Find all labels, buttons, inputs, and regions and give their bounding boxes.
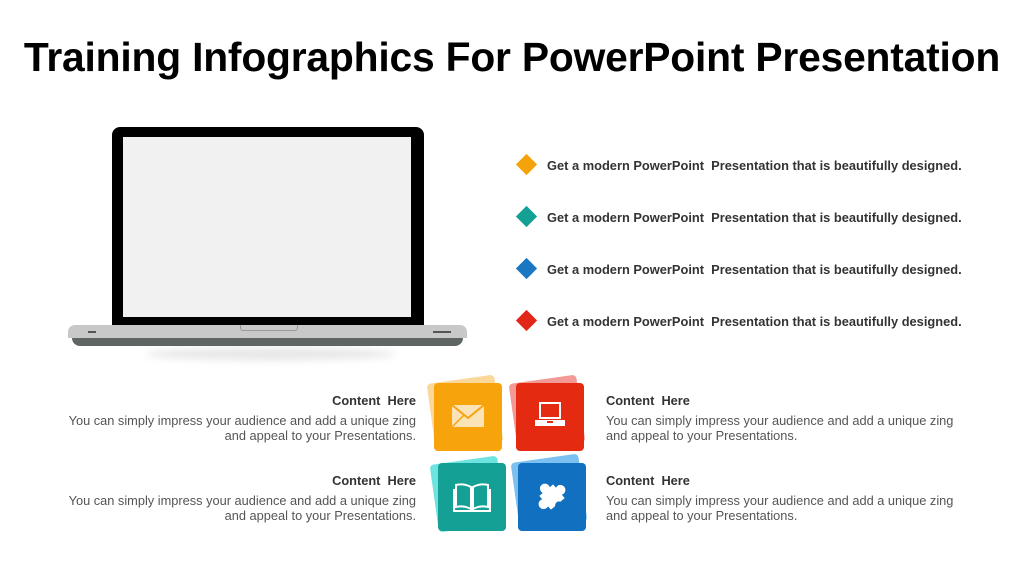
bullet 4: Get a modern PowerPoint Presentation that is beautifully designed.: [547, 314, 962, 329]
laptop illustration: [68, 127, 467, 362]
text block: top left: [69, 393, 416, 443]
text block: bottom left: Content Here: [332, 473, 416, 488]
title: Training Infographics For PowerPoint Presentation: [24, 34, 1000, 80]
icon: book: [438, 463, 506, 531]
icon: laptop: [516, 383, 584, 451]
bullet 1: [516, 154, 962, 175]
text block: top left: You can simply impress your audience and add a unique zing and appeal to your Presentations.: [69, 412, 416, 443]
text block: bottom left: [69, 473, 416, 523]
text block: top left: Content Here: [332, 393, 416, 408]
icon: puzzle: [518, 463, 586, 531]
text block: top right: Content Here: [606, 393, 690, 408]
text block: bottom right: You can simply impress your audience and add a unique zing and appeal to your Presentations.: [606, 492, 953, 523]
text block: bottom right: [606, 473, 953, 523]
bullet 2: [516, 206, 962, 227]
bullet 3: Get a modern PowerPoint Presentation that is beautifully designed.: [547, 262, 962, 277]
text block: bottom right: Content Here: [606, 473, 690, 488]
text block: bottom left: You can simply impress your audience and add a unique zing and appeal to your Presentations.: [69, 492, 416, 523]
text block: top right: You can simply impress your audience and add a unique zing and appeal to your Presentations.: [606, 412, 953, 443]
bullet 4: [516, 310, 962, 331]
icon: envelope: [434, 383, 502, 451]
text block: top right: [606, 393, 953, 443]
icon tiles grid: [427, 375, 587, 532]
bullet 3: [516, 258, 962, 279]
bullet 2: Get a modern PowerPoint Presentation that is beautifully designed.: [547, 210, 962, 225]
bullet 1: Get a modern PowerPoint Presentation that is beautifully designed.: [547, 158, 962, 173]
